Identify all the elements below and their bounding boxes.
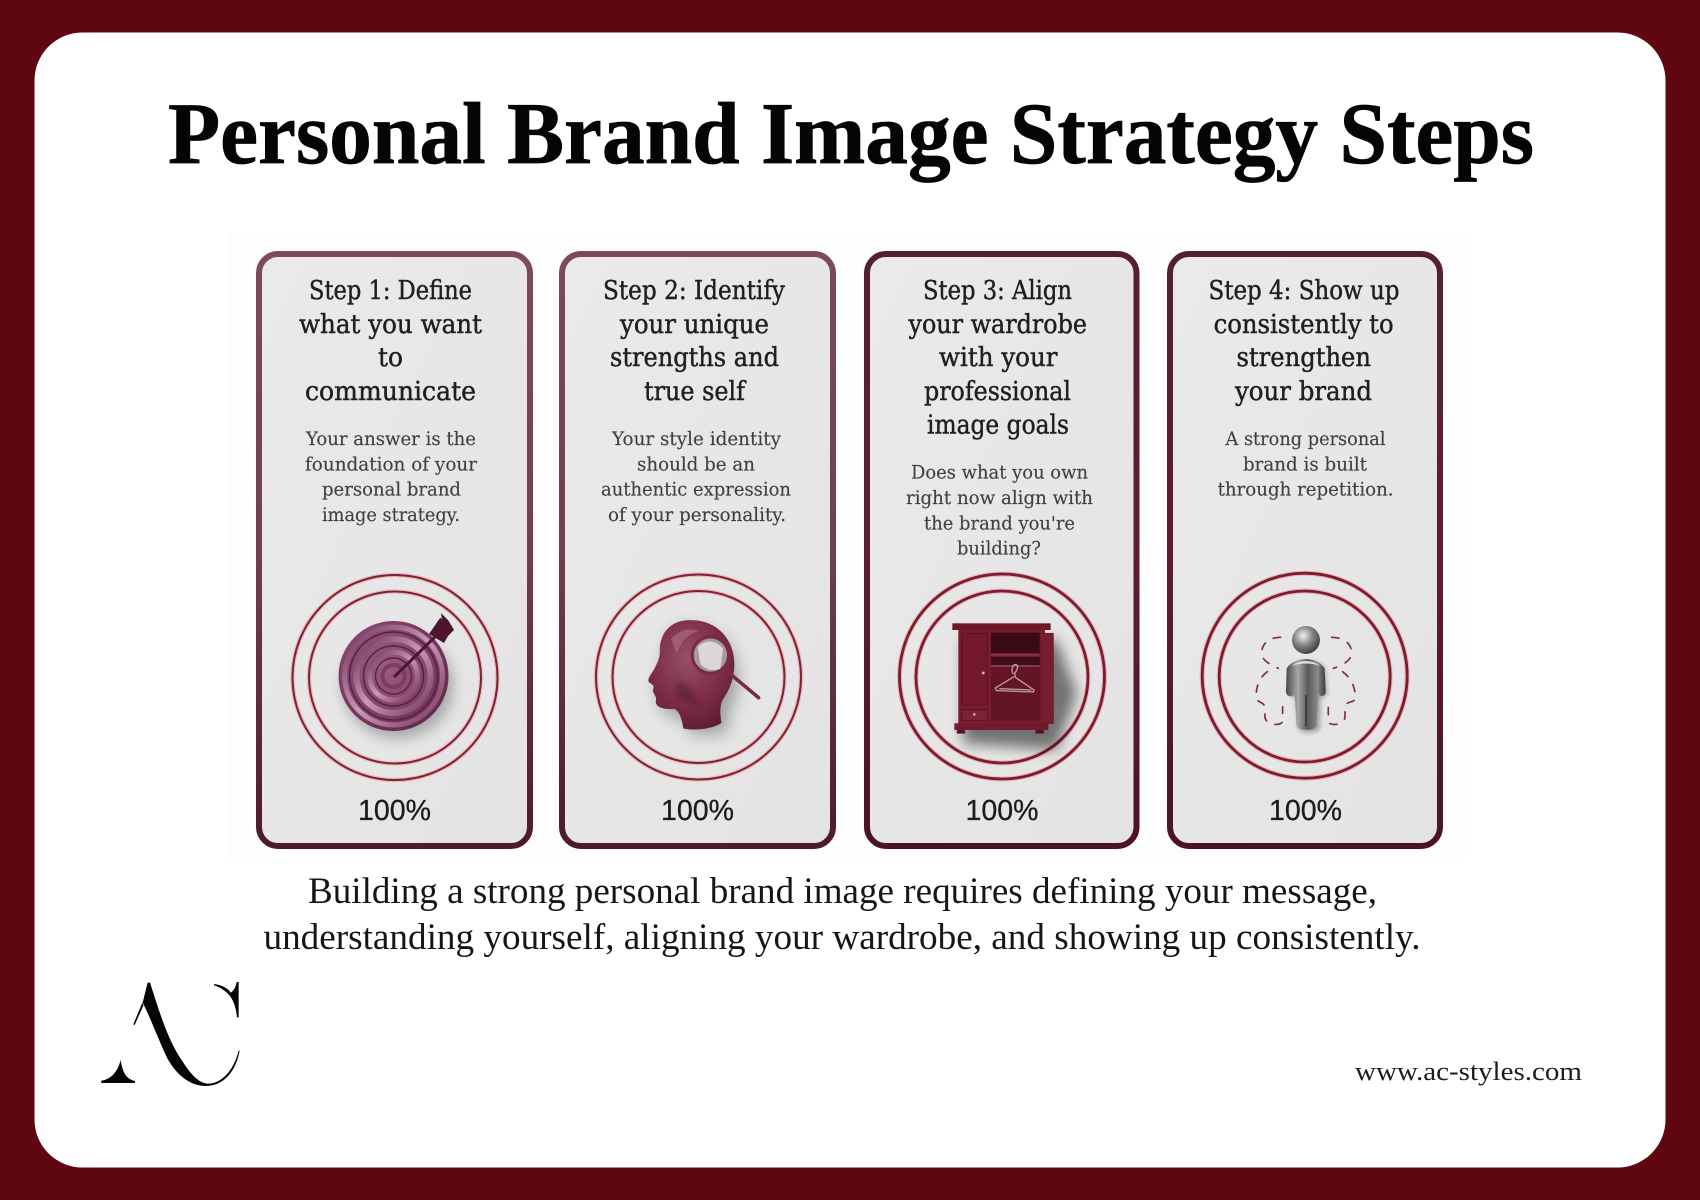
panel: step 1 [259,254,530,846]
step 1 heading: communicate [305,377,476,407]
step 3 description: building? [957,537,1041,559]
logo: AC monogram mark [101,982,240,1086]
panel: step 4 [1170,254,1440,846]
step 1 description: Your answer is the [305,428,476,450]
step 4 description: brand is built [1243,453,1367,475]
step 2 description: authentic expression [601,478,791,500]
step 2 heading: your unique [619,310,769,340]
step 1 description: image strategy. [322,504,460,526]
step 3 description: right now align with [906,487,1093,509]
summary caption: Building a strong personal brand image requires defining your message, [308,871,1377,912]
step 1 description: personal brand [322,478,461,500]
step 3 heading: with your [939,343,1058,373]
step 3 description: Does what you own [911,461,1088,483]
step 2 heading [603,276,785,407]
step 2 heading: strengths and [610,343,779,373]
step 2 description: should be an [637,453,755,475]
summary caption: understanding yourself, aligning your wardrobe, and showing up consistently. [264,917,1420,958]
step 1 description: foundation of your [305,453,478,475]
step 3 heading [908,276,1087,440]
step 1 heading: Step 1: Define [309,276,472,306]
website url: www.ac-styles.com [1355,1057,1582,1086]
step 1 heading: to [378,343,403,373]
panel: step 2 [562,254,833,846]
step 4 rings [1202,573,1407,778]
panel: step 3 [867,254,1136,846]
step 3 heading: professional [924,377,1071,407]
step 1 description [305,428,478,526]
step 4 heading: strengthen [1236,343,1371,373]
step 2 rings [596,574,801,780]
step 3 description [906,461,1093,559]
summary caption [264,871,1420,958]
step 3 description: the brand you're [924,512,1075,534]
step 4 heading: your brand [1234,377,1372,407]
step 4 percentage: 100% [1269,795,1342,827]
step 1 percentage: 100% [358,795,431,827]
step 2 description [601,428,791,526]
step 1 rings [292,575,498,780]
step 4 heading [1208,276,1400,407]
step 4 description: A strong personal [1225,428,1386,450]
step 3 heading: your wardrobe [908,310,1087,340]
step 3 heading: image goals [927,410,1069,440]
step 1 heading: what you want [299,310,483,340]
step 2 description: of your personality. [608,504,786,526]
step 4 heading: consistently to [1214,310,1394,340]
icon: silver figure with dashed outlines [1256,626,1355,733]
icon: head with magnifying glass [648,620,759,735]
icon: target with arrow [338,613,454,738]
step 4 heading: Step 4: Show up [1208,276,1400,306]
step 4 description [1218,428,1394,500]
step 2 heading: true self [644,377,747,407]
step 3 heading: Step 3: Align [923,276,1072,306]
step 2 description: Your style identity [611,428,781,450]
steps image background [228,232,1465,862]
step 1 heading [299,276,483,407]
step 4 description: through repetition. [1218,478,1394,500]
title: Personal Brand Image Strategy Steps [168,86,1534,183]
icon: open wardrobe with hanger [952,623,1077,750]
step 3 percentage: 100% [966,795,1038,827]
step 3 rings [900,574,1104,779]
step 2 heading: Step 2: Identify [603,276,785,306]
step 2 percentage: 100% [661,795,734,827]
